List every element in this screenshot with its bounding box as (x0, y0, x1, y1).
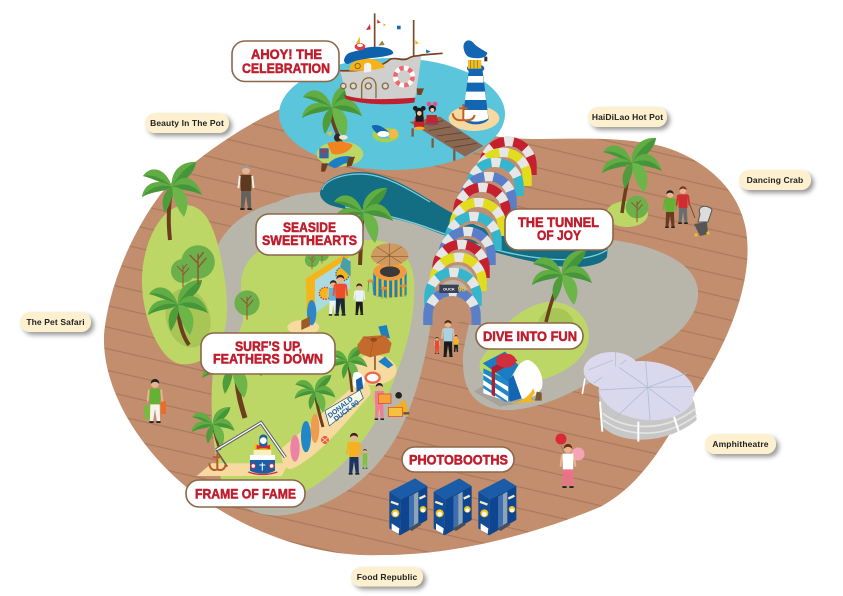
label: The Tunnel of Joy (505, 209, 613, 250)
ship hat roof (344, 43, 393, 64)
photo frame (216, 423, 285, 467)
palm trees (142, 83, 662, 450)
girl with balloon (556, 434, 584, 488)
tag: Food Republic: Food Republic (357, 572, 417, 582)
label: Dive Into Fun: DIVE INTO FUN (483, 328, 577, 344)
tag: Beauty In The Pot (145, 113, 229, 133)
label: Photobooths (402, 447, 514, 472)
beach umbrella (357, 335, 392, 370)
ship and lagoon characters (317, 13, 499, 172)
amphitheatre (582, 352, 699, 442)
dock (409, 117, 483, 161)
label: Seaside Sweethearts (256, 214, 363, 255)
label: Photobooths: PHOTOBOOTHS (409, 452, 508, 468)
Mickey (413, 106, 426, 130)
family at tunnel entrance (434, 320, 459, 357)
anchor at frame (209, 453, 226, 470)
surfboard at wall (307, 300, 316, 325)
green lawn: central (212, 240, 414, 493)
label: The Tunnel of Joy: THE TUNNEL (518, 214, 599, 230)
ship cabin (349, 59, 385, 73)
label: Ahoy! The Celebration: AHOY! THE (251, 46, 322, 62)
Donald statue and anniversary sign: DONALD (327, 396, 355, 420)
man with gift (388, 392, 409, 417)
inflatable ring (366, 373, 380, 383)
girl with gift (373, 383, 391, 420)
Donald statue and anniversary sign: DUCK 90 (333, 399, 361, 423)
Donald on float (372, 125, 399, 142)
grey walkway (210, 192, 698, 515)
label: Dive Into Fun (476, 323, 583, 349)
green lawn: dive into fun (480, 302, 589, 382)
mural wall (306, 255, 351, 313)
tag: Amphitheatre: Amphitheatre (712, 439, 769, 449)
tunnel sign: 90 (458, 285, 466, 294)
label: Ahoy! The Celebration: CELEBRATION (242, 60, 330, 76)
label: Surf's Up, Feathers Down: FEATHERS DOWN (213, 350, 323, 366)
label: Surf's Up, Feathers Down (201, 333, 335, 374)
tag: Dancing Crab (739, 170, 811, 190)
green patch with tree (606, 201, 648, 227)
Minnie (426, 102, 438, 125)
tunnel floor (433, 290, 473, 322)
tag: The Pet Safari: The Pet Safari (26, 317, 85, 327)
Goofy island (317, 141, 363, 167)
label: Frame of Fame (186, 480, 305, 507)
father and child (347, 433, 368, 475)
tag: HaiDiLao Hot Pot (588, 107, 667, 127)
shopper with bags (144, 379, 166, 423)
dive into fun gift (474, 352, 543, 407)
label: Surf's Up, Feathers Down: SURF’S UP, (235, 338, 302, 354)
couple with stroller (664, 186, 712, 237)
tunnel arches (428, 141, 532, 325)
tag: The Pet Safari (20, 312, 91, 332)
tag: Beauty In The Pot: Beauty In The Pot (150, 118, 224, 128)
lighthouse (449, 40, 499, 131)
Donald cake (248, 435, 277, 474)
photo booths (389, 478, 516, 535)
boardwalk deck (104, 105, 748, 555)
label: Seaside Sweethearts: SEASIDE (283, 219, 336, 235)
seaside and surf details (209, 243, 409, 475)
pool (320, 172, 608, 267)
ship hull (340, 55, 422, 104)
wood sign (301, 317, 310, 330)
green lawn: left (142, 205, 227, 364)
lagoon (279, 58, 505, 170)
life ring (395, 68, 413, 85)
anchor (453, 104, 475, 120)
ship keel (344, 95, 415, 104)
deck chair (378, 325, 393, 368)
tunnel sign: DUCK (443, 286, 455, 291)
masts and flags (356, 13, 431, 56)
surfboards and ball (290, 414, 329, 462)
tag: HaiDiLao Hot Pot: HaiDiLao Hot Pot (592, 112, 663, 122)
photographer couple (327, 275, 365, 316)
label: The Tunnel of Joy: OF JOY (537, 227, 582, 243)
tag: Food Republic (351, 567, 423, 586)
label: Seaside Sweethearts: SWEETHEARTS (262, 232, 357, 248)
old man walking (238, 165, 254, 210)
tag: Dancing Crab: Dancing Crab (747, 175, 803, 185)
Donald statue and anniversary sign (325, 372, 365, 426)
label: Ahoy! The Celebration (232, 41, 339, 82)
tag: Amphitheatre (705, 434, 776, 454)
small round trees (171, 196, 648, 320)
Goofy (319, 131, 355, 172)
beach bar (367, 243, 408, 299)
tunnel sign (439, 285, 466, 294)
sand paths (197, 320, 397, 476)
label: Frame of Fame: FRAME OF FAME (195, 486, 296, 502)
ship deck rail (340, 53, 443, 71)
portholes (341, 78, 388, 98)
